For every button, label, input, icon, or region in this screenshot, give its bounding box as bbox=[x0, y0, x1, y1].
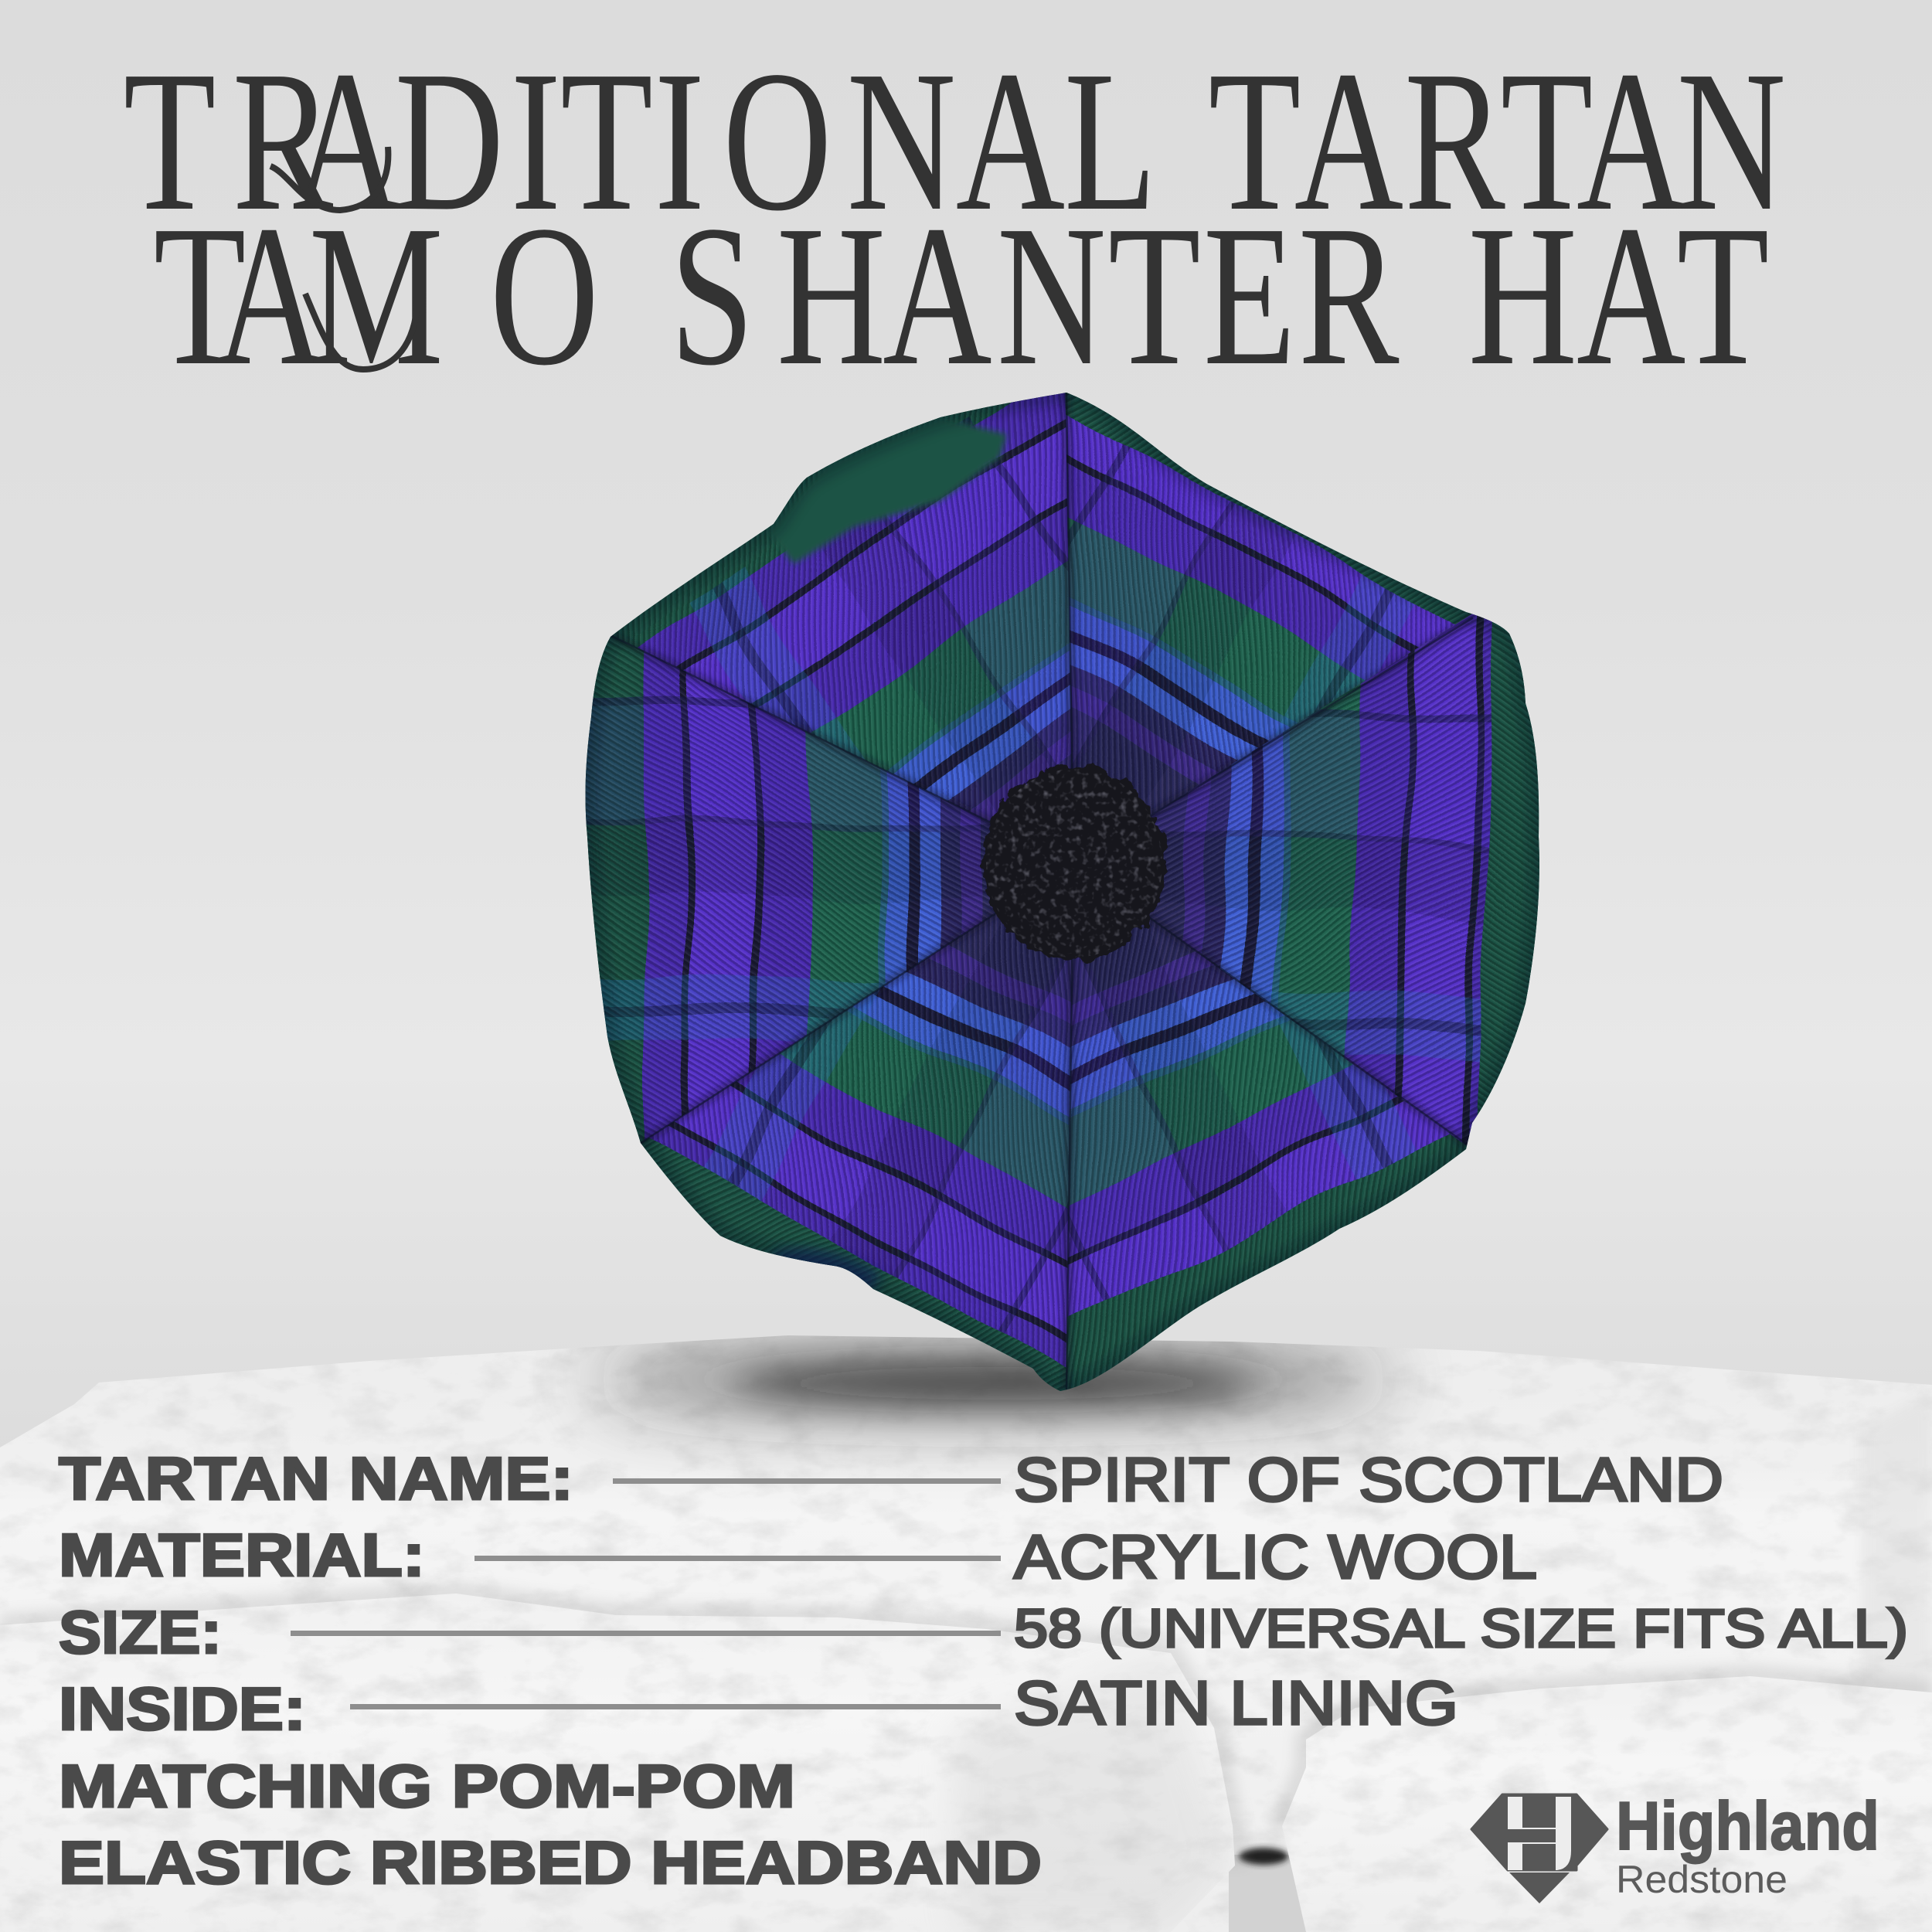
value: spirit of scotland: SPIRIT OF SCOTLAND bbox=[1014, 1445, 1723, 1514]
title bbox=[124, 29, 1786, 407]
title swashes bbox=[270, 147, 417, 369]
title line 1: TRADITIONAL TARTAN bbox=[124, 29, 1786, 253]
hat panel: lower right bbox=[1066, 918, 1467, 1389]
hat panel: right bbox=[1150, 614, 1539, 1145]
hat rim shading bbox=[586, 393, 1539, 1391]
hat shadow on stone bbox=[591, 1353, 1395, 1406]
hat seams bbox=[611, 394, 1472, 1389]
feature: matching pom-pom: MATCHING POM-POM bbox=[59, 1752, 795, 1820]
hat panel: lower left bbox=[641, 913, 1072, 1391]
value: acrylic wool: ACRYLIC WOOL bbox=[1014, 1522, 1537, 1591]
logo wordmark: Highland: Highland bbox=[1616, 1787, 1879, 1864]
stone podium bbox=[0, 1329, 1932, 1932]
feature: elastic ribbed headband: ELASTIC RIBBED HEADBAND bbox=[59, 1828, 1042, 1896]
label: tartan name: TARTAN NAME: bbox=[59, 1444, 573, 1512]
pom-pom bbox=[981, 765, 1167, 962]
title line 2: TAM O SHANTER HAT bbox=[154, 183, 1769, 407]
hat panel: upper right bbox=[1065, 393, 1472, 815]
hat panel: left bbox=[586, 635, 995, 1143]
label: material: MATERIAL: bbox=[59, 1521, 425, 1589]
label: inside: INSIDE: bbox=[59, 1675, 306, 1743]
hat fabric patch: upper left green rim bbox=[767, 417, 1007, 564]
value: size: 58 (UNIVERSAL SIZE FITS ALL) bbox=[1014, 1598, 1908, 1658]
tartan hat bbox=[586, 393, 1539, 1391]
spec list bbox=[59, 1444, 1908, 1896]
label: size: SIZE: bbox=[59, 1598, 222, 1666]
logo bbox=[1471, 1787, 1879, 1903]
logo wordmark: Redstone: Redstone bbox=[1616, 1858, 1787, 1901]
leader lines bbox=[291, 1478, 1001, 1709]
value: satin lining: SATIN LINING bbox=[1014, 1668, 1458, 1737]
logo mark bbox=[1471, 1794, 1607, 1903]
hat fabric shadow: lower left ruffle bbox=[773, 1250, 881, 1298]
hat panel: upper left bbox=[612, 393, 1072, 822]
